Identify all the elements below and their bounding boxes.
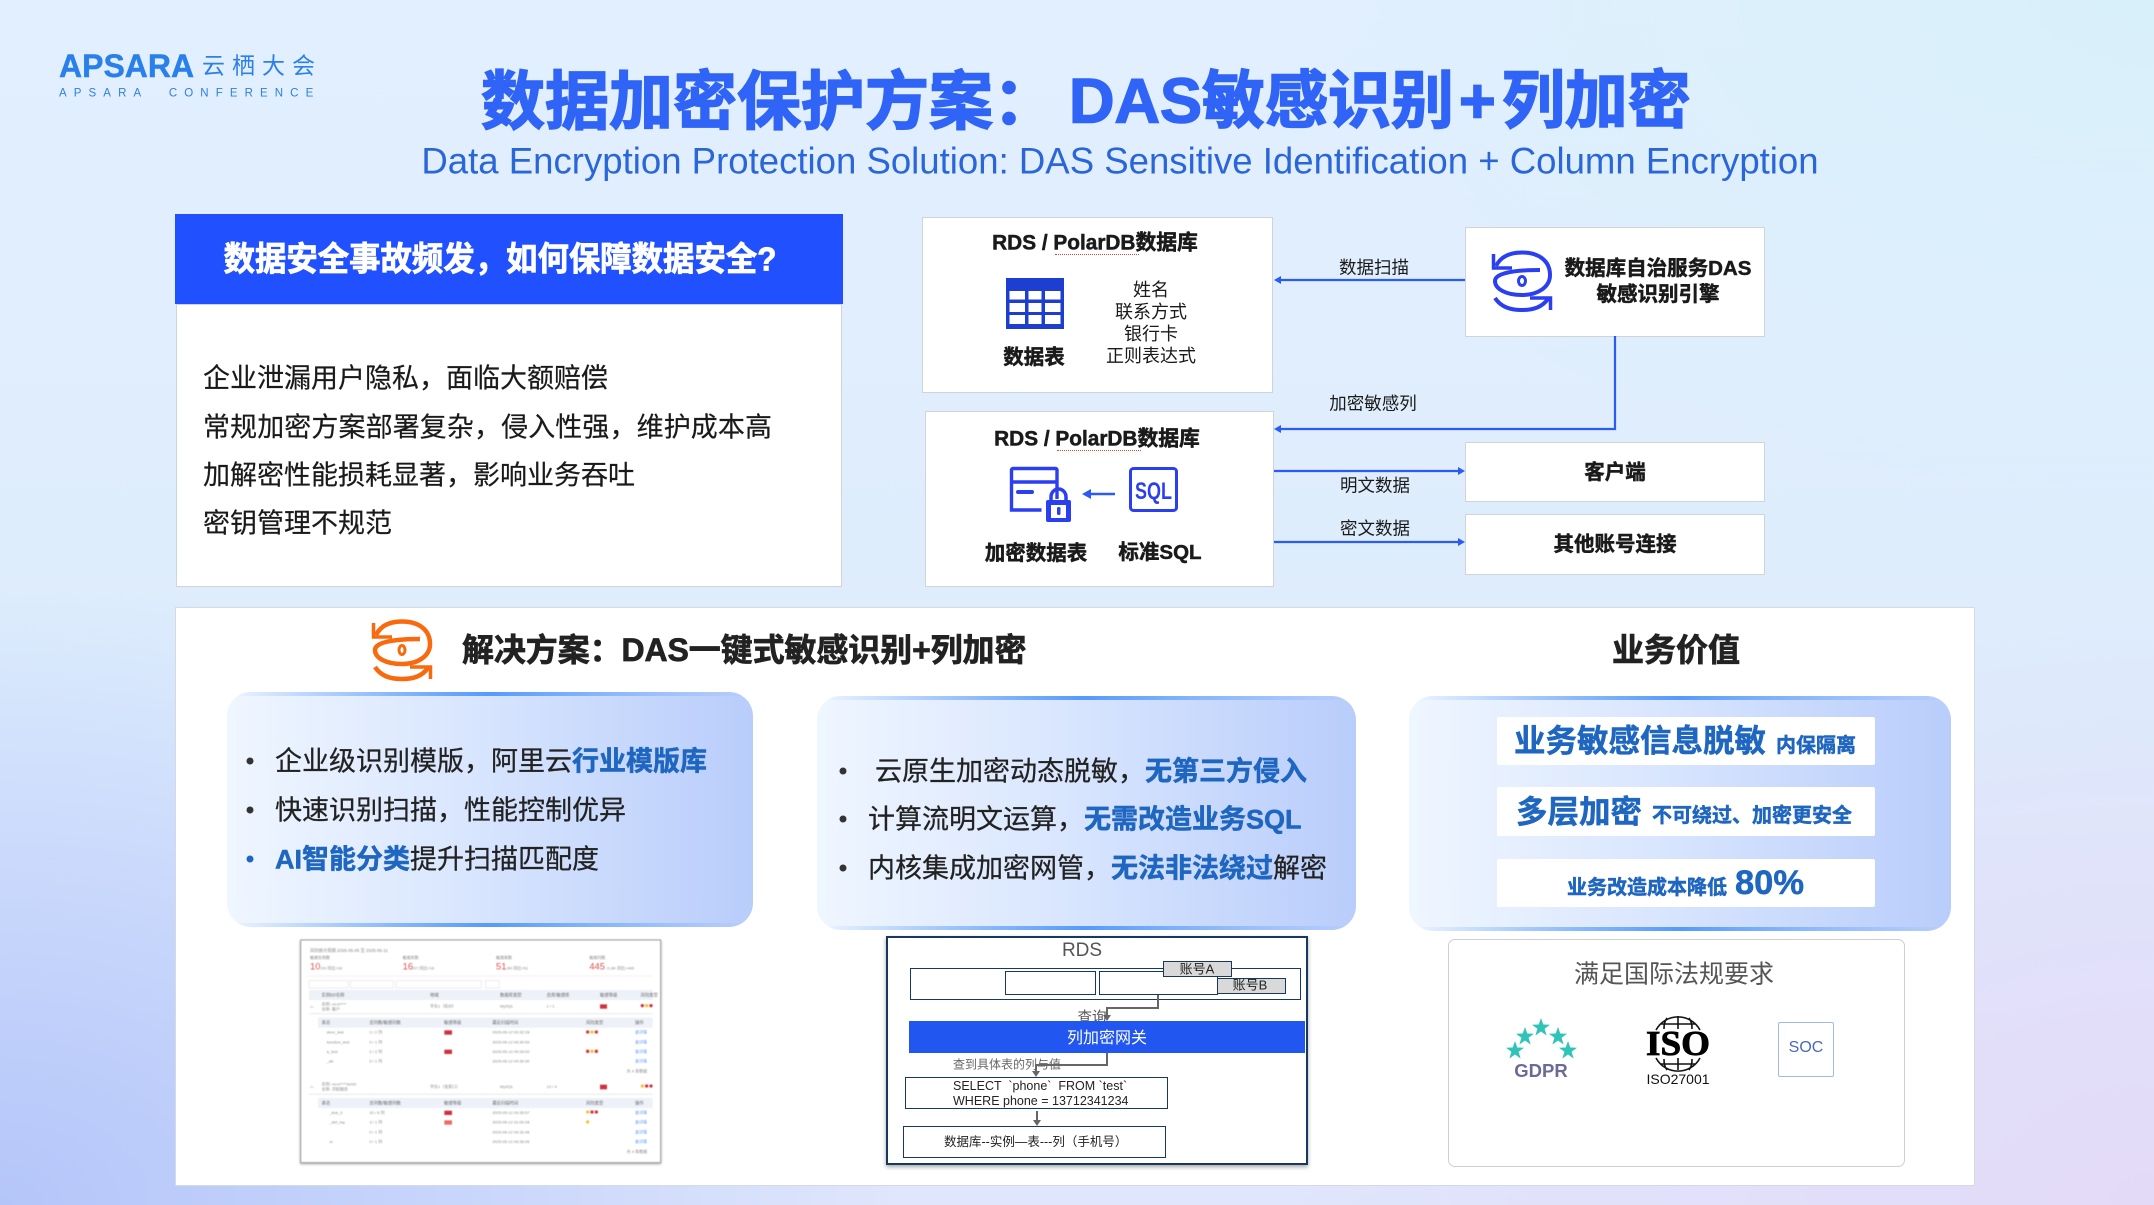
screenshot: sensitive data console: 3 / 1 列 (369, 1119, 382, 1125)
icon: data table (1006, 278, 1064, 329)
label: plaintext: 明文数据 (1340, 475, 1410, 495)
screenshot: sensitive data console: 51 (496, 962, 506, 972)
bullet text: 云原生加密动态脱敏，无第三方侵入 (875, 756, 1307, 786)
bullet text: AI智能分类提升扫描匹配度 (275, 844, 599, 874)
logo: Apsara Conference: APSARA (59, 48, 194, 84)
screenshot: sensitive data console: /1.8K 同比+445 (607, 965, 635, 971)
arrow: encrypt columns (1274, 336, 1616, 433)
screenshot: sensitive data console: /20 同比+16 (321, 965, 343, 971)
problem list: 加解密性能损耗显著，影响业务吞吐 (203, 460, 635, 490)
label: data scan: 数据扫描 (1339, 257, 1409, 277)
diagram: RDS column encryption gateway: 账号A (1180, 962, 1215, 976)
badge: SOC: SOC (1789, 1039, 1823, 1056)
screenshot: sensitive data console: 2025-05-12 00:32:28 (492, 1030, 530, 1035)
screenshot: sensitive data console: 2 / 2 列 (369, 1029, 382, 1035)
card: identification (227, 692, 753, 927)
screenshot: sensitive data console: function_test (327, 1039, 350, 1044)
screenshot: sensitive data console: 1 / 1 (547, 1004, 555, 1009)
screenshot: sensitive data console: 表名 (322, 1019, 330, 1026)
screenshot: sensitive data console: 查详情 (635, 1128, 647, 1134)
diagram: RDS column encryption gateway: 查到具体表的列与值 (953, 1056, 1061, 1072)
panel: solution background (175, 607, 1975, 1186)
screenshot: sensitive data console: MySQL (500, 1084, 514, 1089)
heading: business value: 业务价值 (1612, 632, 1740, 668)
badge: SOC (1778, 1022, 1834, 1077)
sensitive field list: 姓名 (1133, 280, 1169, 300)
panel heading (175, 214, 843, 304)
arrow: ciphertext (1274, 538, 1465, 546)
screenshot: sensitive data console: 0 / 1 列 (369, 1138, 382, 1144)
screenshot: sensitive data console: 最近扫描时间 (492, 1099, 518, 1106)
screenshot: sensitive data console: 操作 (635, 1019, 644, 1026)
label: encrypted table: 加密数据表 (985, 542, 1087, 565)
icon: orange DAS eye (372, 619, 432, 682)
heading: solution: 解决方案：DAS一键式敏感识别+列加密 (462, 632, 1026, 668)
screenshot: sensitive data console: 0 / 1 列 (369, 1058, 382, 1064)
screenshot: sensitive data console: 查详情 (635, 1138, 647, 1144)
screenshot: sensitive data console: 风险类型 (586, 1019, 604, 1026)
screenshot: sensitive data console: 实例ID/名称 (322, 991, 345, 998)
screenshot: sensitive data console: 2025-05-12 00:35:57 (492, 1110, 530, 1115)
screenshot: sensitive data console: /27 同比+16 (413, 965, 435, 971)
diagram: RDS column encryption gateway: 列加密网关 (1067, 1029, 1147, 1047)
label: encrypt columns: 加密敏感列 (1329, 393, 1417, 413)
logo: Apsara Conference: APSARA CONFERENCE (59, 87, 320, 99)
screenshot: sensitive data console: 敏感实例数 (310, 954, 330, 960)
screenshot: sensitive data console: 敏感库数 (403, 954, 419, 960)
screenshot: sensitive data console: 总库/敏感库 (547, 991, 570, 998)
diagram: RDS column encryption gateway (883, 935, 1311, 1170)
arrow: plaintext (1274, 467, 1465, 475)
screenshot: sensitive data console: 2025-05-12 00:32:46 (492, 1129, 530, 1134)
screenshot: sensitive data console: 操作 (635, 1099, 644, 1106)
sensitive field list: 联系方式 (1115, 302, 1187, 322)
icon label: 数据表 (1003, 346, 1065, 369)
value: cost reduction: 80% (1735, 864, 1804, 902)
screenshot: sensitive data console: 查详情 (635, 1109, 647, 1115)
card: business value background (1409, 696, 1951, 931)
screenshot: sensitive data console: 0 / 1 列 (369, 1038, 382, 1044)
screenshot: sensitive data console: 风险类型 (586, 1099, 604, 1106)
screenshot: sensitive data console: _test_0 (328, 1110, 343, 1115)
icon: SQL (1129, 467, 1178, 512)
title (481, 66, 1691, 138)
panel: RDS database encrypted (925, 411, 1274, 587)
panel: DAS engine (1465, 227, 1765, 337)
screenshot: sensitive data console: 共 4 条数据 (627, 1068, 647, 1074)
screenshot: sensitive data console: 2025-05-12 00:33:02 (492, 1049, 530, 1054)
screenshot: sensitive data console: 实例: rm-b**** (322, 1000, 347, 1006)
screenshot: sensitive data console: 最近扫描时间 (492, 1019, 518, 1026)
screenshot: sensitive data console: ul (329, 1139, 333, 1144)
screenshot: sensitive data console: 445 (589, 962, 605, 972)
diagram: RDS column encryption gateway: 查询 (1078, 1009, 1106, 1026)
screenshot: sensitive data console: 实例: rm-b****2e0i3 (322, 1081, 357, 1087)
subtitle: Data Encryption Protection Solution: DAS Sensitive Identification + Column Encryption (421, 139, 1819, 181)
bullet (840, 816, 846, 822)
bullet text: 计算流明文运算，无需改造业务SQL (868, 804, 1302, 834)
screenshot: sensitive data console: 名称: 客户 (322, 1006, 340, 1012)
arrow: SQL to encrypted table (1082, 489, 1115, 499)
screenshot: sensitive data console: 总列数/敏感列数 (369, 1019, 402, 1026)
diagram: RDS column encryption gateway: WHERE phone = 13712341234 (953, 1094, 1129, 1108)
problem list: 常规加密方案部署复杂，侵入性强，维护成本高 (203, 412, 772, 442)
screenshot: sensitive data console: 2025-05-12 01:00:28 (492, 1120, 530, 1125)
bullet (246, 806, 254, 814)
engine name: 数据库自治服务DAS (1565, 257, 1751, 280)
screenshot: sensitive data console: 10 (310, 962, 320, 972)
screenshot: sensitive data console: 2025-05-12 00:30:59 (492, 1039, 530, 1044)
screenshot: sensitive data console: 总列数/敏感列数 (369, 1099, 402, 1106)
bullet (840, 864, 846, 872)
screenshot: sensitive data console: 地域 (430, 991, 439, 997)
value: multilayer encryption: 不可绕过、加密更安全 (1652, 805, 1852, 827)
value: desensitization: 内保隔离 (1776, 735, 1856, 757)
bullet text: 快速识别扫描，性能控制优异 (275, 795, 626, 825)
screenshot: sensitive data console: 10 / 4 (547, 1084, 557, 1089)
badge: ISO27001 (1646, 1016, 1710, 1087)
screenshot: sensitive data console: 2 / 2 列 (369, 1048, 382, 1054)
logo: Apsara Conference (59, 48, 322, 99)
screenshot: sensitive data console: 10 / 6 列 (369, 1109, 384, 1115)
screenshot: sensitive data console: 查详情 (635, 1029, 647, 1035)
screenshot: sensitive data console: 华东1（张家口） (430, 1083, 460, 1089)
diagram: RDS column encryption gateway: SELECT `phone` FROM `test` (953, 1079, 1127, 1093)
bullet (246, 758, 254, 764)
screenshot: sensitive data console: a_test (327, 1049, 338, 1054)
sensitive field list (1106, 280, 1196, 366)
screenshot: sensitive data console: 名称: 洋航服务 (322, 1086, 348, 1092)
label: ciphertext: 密文数据 (1340, 518, 1410, 538)
screenshot: sensitive data console: /60 同比+51 (507, 965, 529, 971)
compliance heading: 满足国际法规要求 (1574, 960, 1774, 988)
value: multilayer encryption: 多层加密 (1516, 794, 1642, 830)
logo: Apsara Conference: 云栖大会 (202, 52, 322, 78)
card: encryption (817, 696, 1356, 930)
screenshot: sensitive data console: 敏感表数 (496, 954, 512, 960)
problem list: 企业泄漏用户隐私，面临大额赔偿 (203, 363, 608, 393)
panel: RDS database scan (922, 217, 1273, 393)
panel: compliance (1448, 939, 1905, 1167)
panel: client (1465, 442, 1765, 502)
screenshot: sensitive data console: _ab (326, 1059, 334, 1064)
screenshot: sensitive data console: 敏感等级 (444, 1099, 462, 1106)
badge: GDPR: GDPR (1514, 1060, 1568, 1081)
bullet (246, 856, 254, 862)
panel: other accounts (1465, 514, 1765, 575)
value: desensitization: 业务敏感信息脱敏 (1514, 722, 1766, 758)
screenshot: sensitive data console: 查详情 (635, 1038, 647, 1044)
screenshot: sensitive data console: 共 4 条数据 (627, 1148, 647, 1154)
icon: encrypted table (1010, 466, 1071, 522)
screenshot: sensitive data console: 查详情 (635, 1119, 647, 1125)
screenshot: sensitive data console: 敏感列数 (589, 954, 605, 960)
screenshot: sensitive data console: sbox_test (327, 1030, 345, 1035)
badge: ISO27001: ISO (1646, 1024, 1710, 1063)
panel heading: 数据安全事故频发，如何保障数据安全? (224, 241, 776, 278)
screenshot: sensitive data console: 表名 (322, 1099, 330, 1106)
diagram: RDS column encryption gateway: RDS (1062, 940, 1102, 961)
value: desensitization (1497, 717, 1875, 765)
screenshot: sensitive data console: MySQL (500, 1004, 514, 1009)
screenshot: sensitive data console (298, 938, 663, 1166)
screenshot: sensitive data console: 2025-05-12 00:30:30 (492, 1059, 530, 1064)
bullet (840, 768, 846, 774)
screenshot: sensitive data console: 风险类型 (641, 991, 659, 998)
arrow: data scan (1274, 276, 1465, 284)
panel: DAS engine: 敏感识别引擎 (1596, 283, 1720, 306)
diagram: RDS column encryption gateway: 账号B (1233, 978, 1267, 992)
screenshot: sensitive data console: 敏感等级 (600, 991, 618, 998)
screenshot: sensitive data console: 敏感等级 (444, 1019, 462, 1026)
screenshot: sensitive data console: 华东1（杭州） (430, 1003, 456, 1009)
bullet text: 企业级识别模版，阿里云行业模版库 (275, 746, 707, 776)
screenshot: sensitive data console: 0 / 1 列 (369, 1128, 382, 1134)
screenshot: sensitive data console: _def_ray (328, 1120, 345, 1125)
problem list: 密钥管理不规范 (203, 508, 392, 538)
problem list (176, 304, 842, 587)
screenshot: sensitive data console: 2025-05-12 00:35:06 (492, 1139, 530, 1144)
bullet text: 内核集成加密网管，无法非法绕过解密 (868, 853, 1327, 883)
screenshot: sensitive data console: 查详情 (635, 1048, 647, 1054)
client label: 客户端 (1584, 461, 1646, 484)
value: cost reduction: 业务改造成本降低 (1567, 877, 1727, 899)
label: standard SQL: 标准SQL (1118, 541, 1202, 564)
sensitive field list: 银行卡 (1124, 324, 1178, 344)
box heading: RDS / PolarDB数据库 (992, 232, 1198, 255)
other accounts label: 其他账号连接 (1554, 533, 1676, 556)
title: DAS敏感识别+列加密 (1069, 66, 1691, 136)
badge: GDPR (1506, 1018, 1577, 1081)
screenshot: sensitive data console: 查详情 (635, 1058, 647, 1064)
title: 数据加密保护方案： (481, 66, 1057, 138)
icon: SQL: SQL (1135, 478, 1172, 505)
icon: DAS eye (1492, 250, 1552, 312)
box heading: RDS / PolarDB数据库 (994, 428, 1200, 451)
value: cost reduction (1497, 859, 1875, 907)
value: multilayer encryption (1497, 787, 1875, 836)
diagram: RDS column encryption gateway: 数据库--实例—表---列（手机号） (944, 1134, 1127, 1149)
screenshot: sensitive data console: 风险统计周期 2025-05-05 至 2025-05-11 (310, 947, 388, 954)
screenshot: sensitive data console: 16 (403, 962, 413, 972)
sensitive field list: 正则表达式 (1106, 346, 1196, 366)
badge: ISO27001: ISO27001 (1646, 1071, 1710, 1087)
panel: problem (175, 214, 843, 587)
screenshot: sensitive data console: 数据库类型 (500, 991, 522, 998)
